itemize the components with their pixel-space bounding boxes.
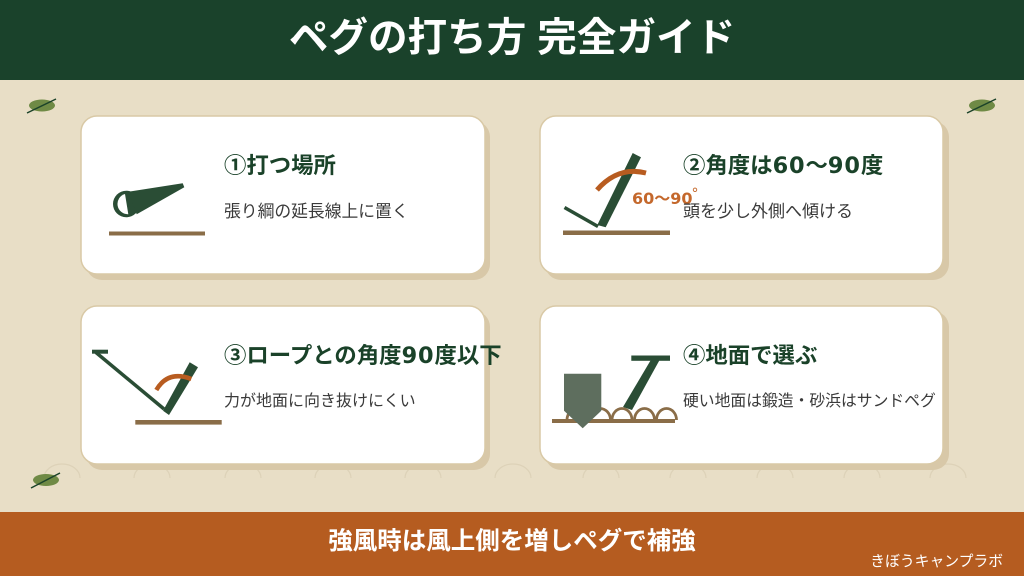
icon: ground, forged peg and sand peg [552, 356, 676, 428]
description: 力が地面に向き抜けにくい [224, 392, 416, 410]
panel: 2 angle [540, 116, 949, 280]
description: 張り綱の延長線上に置く [224, 202, 409, 221]
icon: leaf bottom left [31, 473, 60, 488]
description: 硬い地面は鍛造・砂浜はサンドペグ [683, 392, 936, 410]
heading: ④地面で選ぶ [683, 343, 817, 368]
angle label: ° [692, 186, 699, 202]
panel: 4 ground choice [540, 306, 949, 470]
heading: ②角度は60〜90度 [683, 153, 883, 179]
credit: きぼうキャンプラボ [870, 553, 1003, 570]
description: 頭を少し外側へ傾ける [683, 202, 853, 221]
icon: angled peg with rope and arc [563, 153, 670, 235]
icon: leaf top right [967, 99, 996, 113]
icon: peg with rope and arc [92, 350, 222, 425]
panel: 1 strike location [81, 116, 490, 280]
heading: ③ロープとの角度90度以下 [224, 343, 502, 369]
footer band [0, 512, 1024, 576]
angle label: 60〜90 [632, 185, 693, 209]
header band [0, 0, 1024, 80]
panel: 3 rope angle [81, 306, 502, 470]
icon: leaf top left [27, 99, 56, 113]
footer message: 強風時は風上側を増しペグで補強 [328, 526, 696, 555]
icon: peg with hook head [109, 183, 205, 236]
title: ペグの打ち方 完全ガイド [289, 16, 735, 60]
heading: ①打つ場所 [224, 153, 336, 178]
